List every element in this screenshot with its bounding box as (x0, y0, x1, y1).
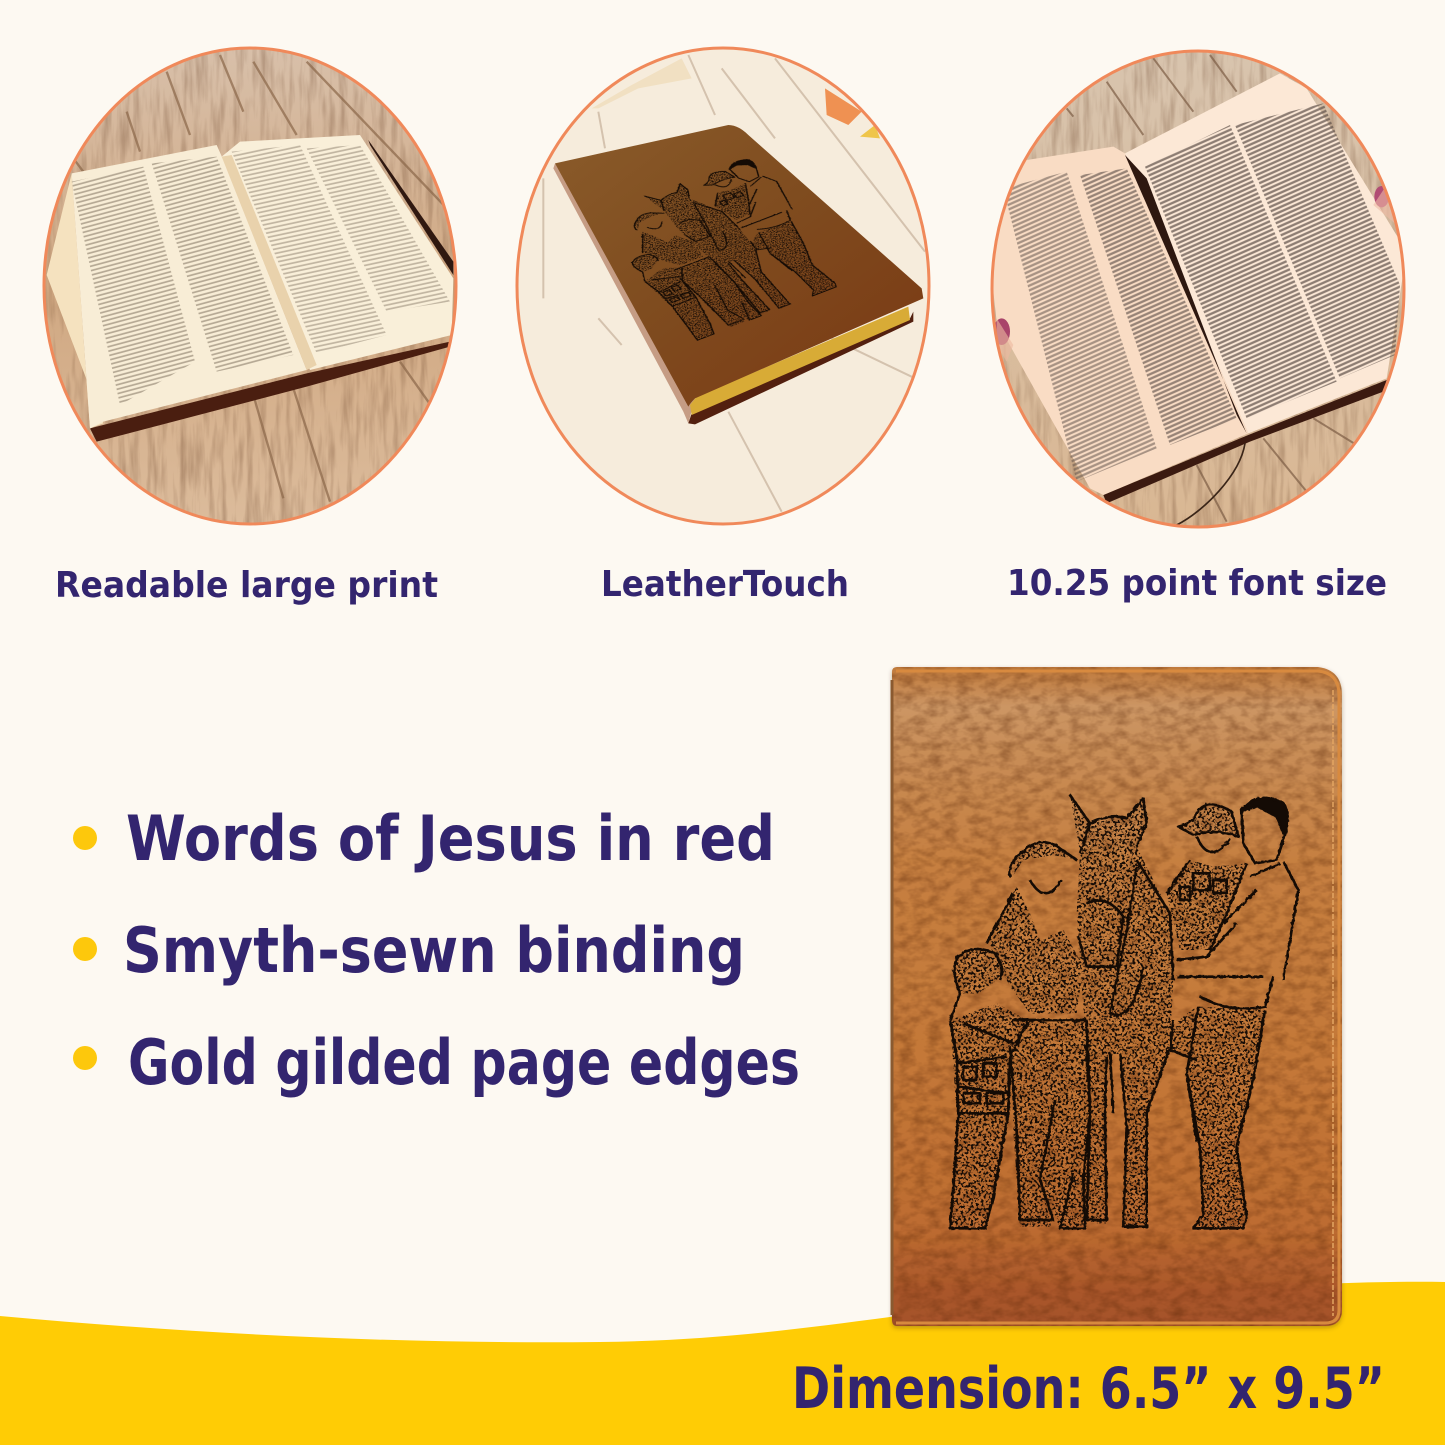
bullet dot (73, 1046, 97, 1070)
yellow wave footer (0, 1282, 1445, 1445)
caption: readable large print: Readable large print (55, 565, 438, 606)
bullet dot (73, 937, 97, 961)
photo: open bible close-up (990, 45, 1410, 530)
photo: open bible on wood (40, 45, 460, 530)
feature: gilded edges: Gold gilded page edges (128, 1026, 800, 1099)
bullet dot (73, 826, 97, 850)
bullet list (73, 802, 800, 1099)
engraved family portrait (950, 795, 1298, 1228)
leather bible cover (892, 667, 1342, 1326)
feature: smyth-sewn: Smyth-sewn binding (123, 914, 745, 987)
engraving on cover (630, 158, 837, 341)
feature: words of jesus: Words of Jesus in red (126, 802, 775, 875)
caption: leathertouch: LeatherTouch (601, 564, 849, 605)
photo: leather bible cover on wood (515, 45, 935, 530)
caption: font size: 10.25 point font size (1007, 563, 1387, 604)
